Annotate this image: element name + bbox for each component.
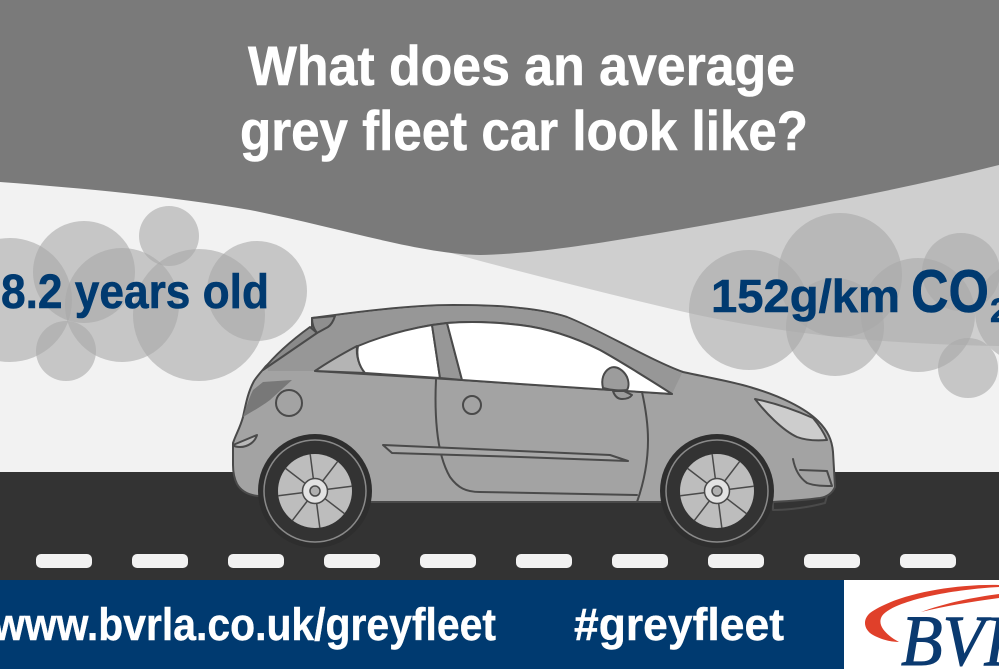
rear side window [357, 325, 440, 378]
website link: www.bvrla.co.uk/greyfleet [0, 599, 496, 650]
stat: vehicle age: 8.2 years old [1, 266, 269, 319]
footer bar [0, 580, 844, 669]
fog light [793, 459, 832, 486]
smoke cloud: right [689, 213, 999, 398]
front side window [447, 322, 672, 394]
B pillar [432, 323, 462, 380]
wing mirror [602, 367, 632, 399]
road [0, 472, 999, 580]
rear wheel [258, 434, 372, 548]
headlight [755, 399, 827, 440]
fuel cap [276, 390, 302, 416]
rear reflector [233, 435, 257, 447]
front wheel [660, 434, 774, 548]
road centre dashes [36, 554, 956, 568]
background: dark grey sky [0, 0, 999, 255]
stat: CO2 emissions [711, 258, 999, 330]
rear windscreen [263, 327, 317, 370]
door handle [463, 396, 481, 414]
title: grey fleet car look like? [240, 99, 808, 162]
tail light [243, 380, 292, 417]
BVRLA logo [844, 580, 999, 669]
window arch line [315, 322, 672, 394]
stat: CO2 emissions: 152g/km [711, 270, 900, 322]
car [233, 305, 835, 510]
side trim strip [383, 445, 628, 461]
front lip [773, 496, 827, 510]
car body [233, 305, 835, 502]
quarter window [315, 346, 365, 373]
car roof band [267, 306, 682, 394]
background: light grey wave band [440, 150, 999, 346]
title [240, 34, 808, 162]
smoke cloud: left [0, 206, 307, 381]
stat: CO2 emissions: CO [911, 258, 989, 325]
door lines [436, 380, 648, 502]
hashtag: #greyfleet [574, 599, 784, 650]
title: What does an average [248, 34, 795, 97]
roof spoiler [312, 316, 335, 333]
